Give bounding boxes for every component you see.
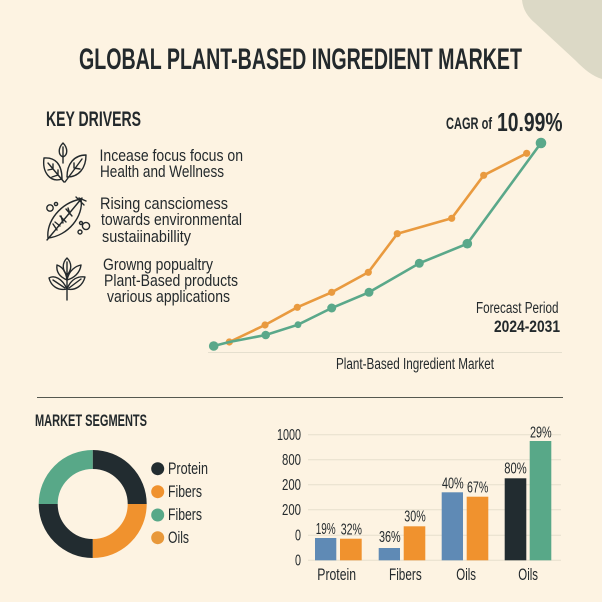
y axis labels: 1000 — [277, 427, 301, 444]
y axis labels: 0 — [295, 552, 301, 570]
legend: Protein — [168, 460, 208, 478]
bar value labels: 80% — [504, 460, 527, 477]
icon: three leaves — [44, 143, 86, 182]
panel: key drivers — [44, 108, 243, 306]
callout: CAGR: CAGR of — [446, 114, 492, 133]
legend: Fibers — [168, 506, 202, 524]
bars — [315, 441, 551, 560]
bar value labels: 40% — [442, 475, 464, 492]
legend: Fibers — [168, 483, 202, 501]
x axis labels: Fibers — [389, 566, 422, 584]
bar value labels: 29% — [530, 424, 552, 441]
legend — [151, 460, 208, 547]
text: growing popularity: Plant-Based products — [104, 271, 238, 290]
text: health and wellness — [100, 146, 243, 181]
line chart: market growth — [208, 138, 562, 373]
text: environmental sustainability: towards environmental — [101, 210, 242, 229]
callout: forecast period: 2024-2031 — [494, 317, 560, 336]
y axis labels: 200 — [282, 502, 301, 519]
bar value labels: 36% — [379, 529, 401, 546]
text: growing popularity: various applications — [107, 287, 230, 306]
line series: orange — [226, 150, 530, 346]
callout: forecast period: Forecast Period — [476, 300, 558, 317]
x axis labels: Oils — [456, 566, 476, 584]
donut chart — [48, 460, 137, 548]
bar value labels: 67% — [467, 480, 488, 497]
text: environmental sustainability: Rising cansciomess — [100, 194, 228, 213]
y axis labels: 800 — [282, 452, 301, 469]
bar value labels: 19% — [316, 521, 336, 538]
x axis labels: Oils — [518, 566, 538, 584]
y axis labels: 0 — [295, 528, 301, 544]
callout: CAGR: 10.99% — [497, 107, 562, 137]
heading: key drivers: KEY DRIVERS — [46, 108, 141, 131]
callout: forecast period — [476, 300, 560, 336]
text: environmental sustainability — [100, 194, 242, 246]
panel: market segments — [35, 412, 208, 548]
bar value labels: 32% — [341, 522, 362, 539]
bar chart — [277, 424, 561, 584]
text: growing popularity — [103, 255, 238, 306]
text: environmental sustainability: sustaiinabillity — [102, 227, 191, 246]
icon: plant sprig — [49, 258, 85, 300]
text: growing popularity: Growng popualtry — [103, 255, 213, 274]
line series: green — [209, 138, 546, 351]
text: health and wellness: Health and Wellness — [100, 162, 224, 181]
legend: Oils — [168, 529, 189, 547]
x axis labels — [317, 566, 538, 584]
y axis labels: 200 — [282, 477, 301, 494]
x axis labels: Protein — [317, 566, 356, 584]
icon: pod leaf with bubbles — [47, 197, 90, 240]
decorative corner shape — [522, 0, 602, 79]
bar value labels — [316, 424, 552, 546]
axis label: Plant-Based Ingredient Market — [336, 356, 495, 373]
text: health and wellness: Incease focus focus on — [100, 146, 243, 165]
heading: market segments: MARKET SEGMENTS — [35, 412, 147, 430]
bar value labels: 30% — [404, 509, 426, 526]
callout: CAGR — [446, 107, 562, 137]
y axis labels — [277, 427, 301, 570]
